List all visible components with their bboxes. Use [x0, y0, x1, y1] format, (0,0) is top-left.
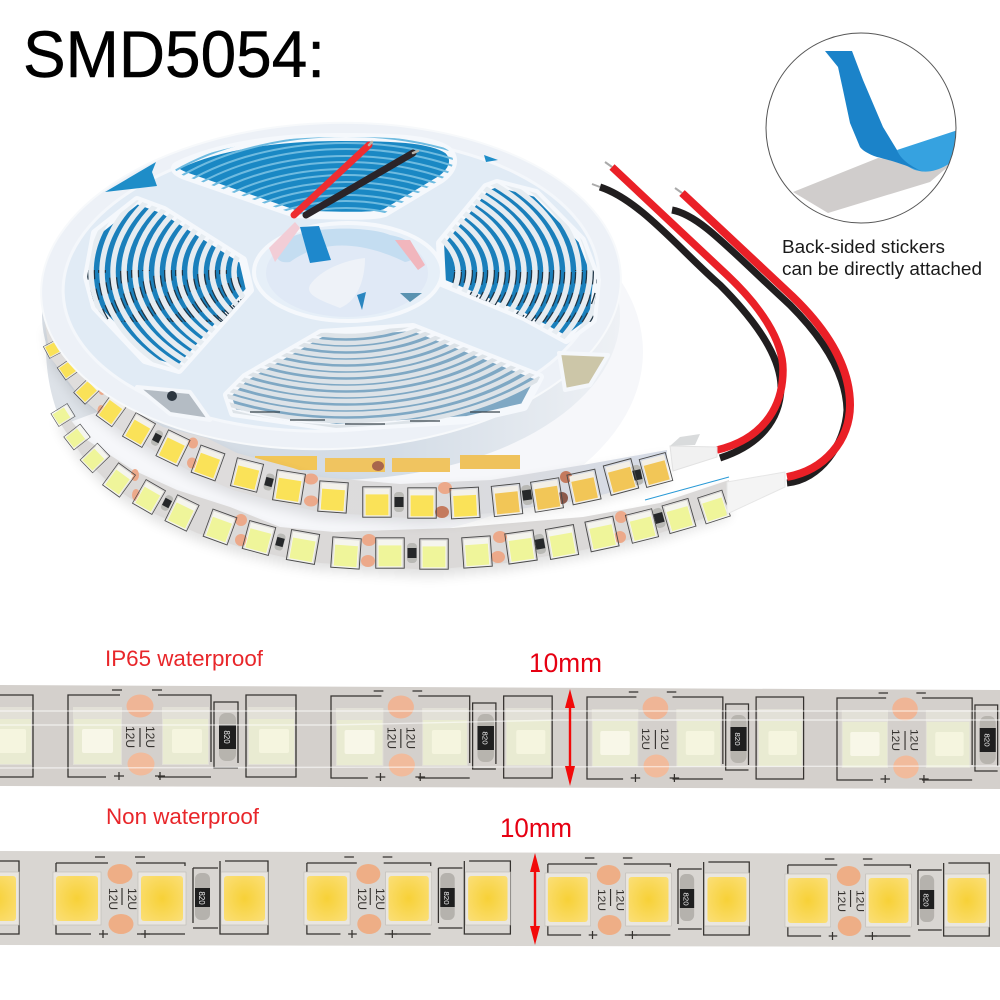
module 1: 12U [143, 726, 157, 748]
module 2: 12U [404, 727, 417, 749]
dimension label: 10mm upper: 10mm [529, 648, 602, 678]
module 4: 820 [922, 893, 931, 907]
reel hub [254, 222, 442, 321]
lower LED strip [51, 404, 730, 577]
wires: upper strip [592, 162, 783, 458]
wires: lower strip [672, 188, 850, 483]
module 1: 12U [106, 888, 120, 910]
module 3 [545, 858, 749, 939]
upper reel body [42, 152, 620, 480]
upper LED strip [43, 323, 673, 525]
inset caption [782, 236, 982, 279]
module 2 [304, 857, 510, 938]
module 3: 12U [639, 728, 652, 750]
inset caption: Back-sided stickers [782, 236, 945, 257]
module 0 [0, 857, 19, 938]
module 3: 820 [733, 732, 742, 746]
module 3: 12U [595, 889, 608, 911]
dimension label: 10mm lower: 10mm [500, 813, 572, 843]
title: SMD5054: [23, 17, 325, 91]
window: bottom [223, 323, 540, 430]
module 3: 12U [658, 728, 671, 750]
module 4: 820 [982, 733, 991, 747]
module 4 [837, 693, 1000, 783]
module 2: 820 [442, 891, 451, 905]
module 2: 820 [480, 731, 489, 745]
module 2 [331, 691, 552, 781]
arrow: 10mm lower [530, 853, 540, 945]
module 1: 12U [125, 888, 139, 910]
module 4: 12U [908, 729, 920, 751]
module 1: 820 [222, 730, 231, 744]
module 2: 12U [373, 888, 386, 910]
window: top [172, 137, 457, 220]
module 1 [68, 690, 296, 780]
module 0 [0, 690, 33, 780]
module 3: 820 [682, 892, 691, 906]
circular inset: back adhesive [766, 33, 958, 223]
module 4: 12U [853, 890, 866, 912]
module 4: 12U [889, 729, 902, 751]
module 1 [53, 857, 268, 938]
label: IP65 waterproof: IP65 waterproof [105, 646, 264, 671]
module 3 [587, 692, 804, 782]
module 2: 12U [384, 727, 398, 749]
IP65 waterproof strip [0, 685, 1000, 789]
reel flange [35, 113, 627, 459]
arrow: 10mm upper [565, 689, 575, 786]
module 1: 820 [197, 891, 206, 905]
wires: reel centre [294, 142, 418, 215]
window: left [83, 196, 254, 374]
wire sleeves [670, 434, 785, 514]
label: Non waterproof: Non waterproof [106, 804, 260, 829]
inset caption: can be directly attached [782, 258, 982, 279]
module 3: 12U [613, 889, 626, 911]
module 1: 12U [123, 726, 137, 748]
module 4: 12U [835, 890, 848, 912]
module 2: 12U [355, 888, 368, 910]
LED strip reels photo [35, 113, 850, 577]
window: right [436, 179, 598, 344]
non-waterproof strip [0, 851, 1000, 947]
lower reel flange [46, 164, 643, 540]
module 4 [785, 859, 989, 940]
